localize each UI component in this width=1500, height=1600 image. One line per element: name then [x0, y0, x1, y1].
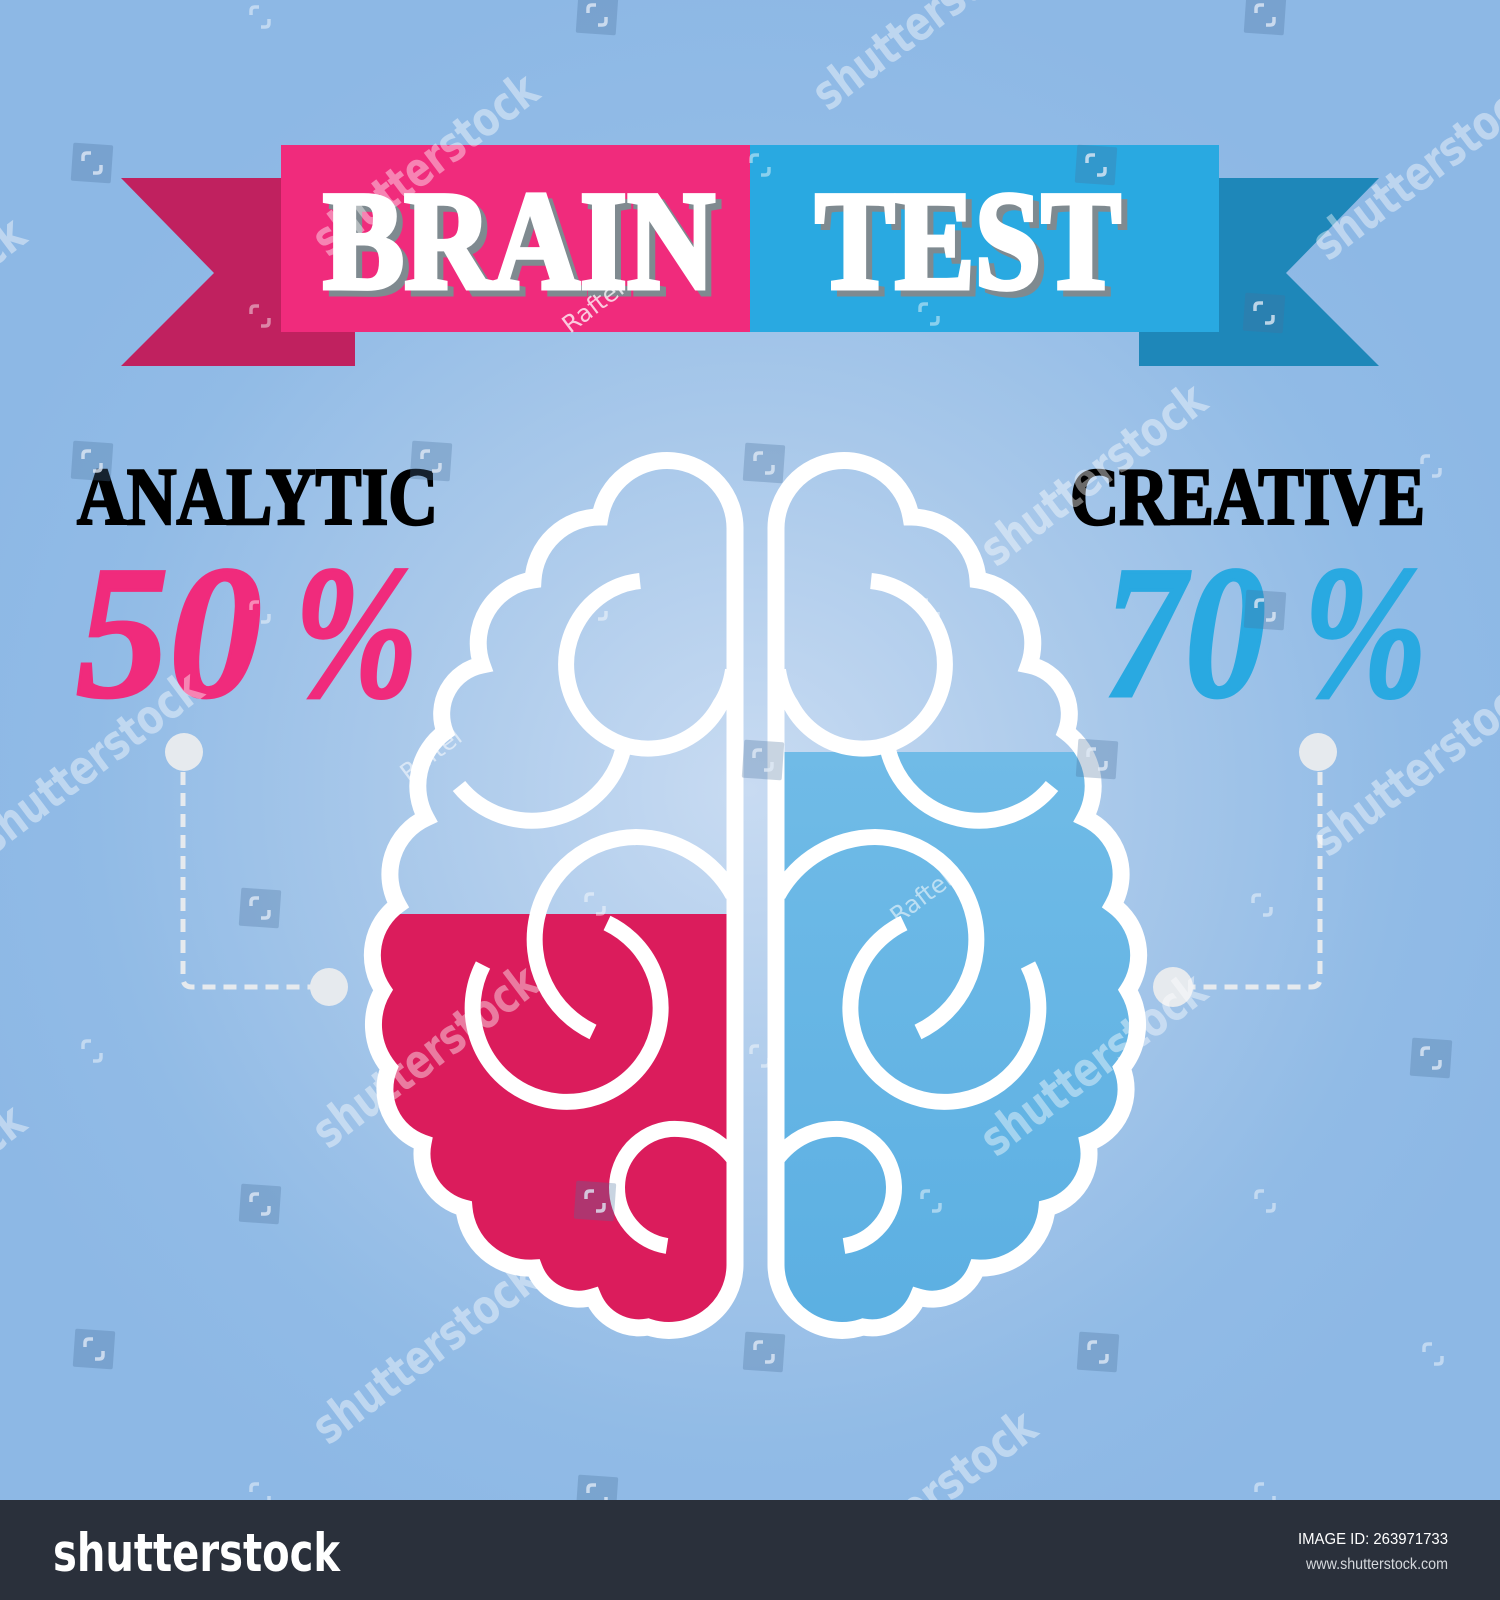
- footer logo: shutterstock: [53, 1523, 341, 1584]
- ribbon pink band: [281, 145, 750, 332]
- ribbon blue band: [750, 145, 1219, 332]
- heading: TEST: TEST: [821, 169, 1127, 325]
- connector: right: [1153, 733, 1337, 1007]
- footer image id: IMAGE ID: 263971733: [1298, 1531, 1448, 1548]
- value: 50 percent: 50: [76, 528, 262, 738]
- heading: BRAIN: BRAIN: [329, 169, 721, 325]
- footer url: www.shutterstock.com: [1305, 1556, 1448, 1573]
- ribbon left tail: [121, 178, 355, 366]
- watermark: shutterstock: [302, 61, 550, 268]
- title ribbon: [121, 145, 1379, 366]
- watermark: shutterstock: [302, 953, 550, 1160]
- footer bar: [0, 1500, 1500, 1600]
- connector: left: [165, 733, 348, 1006]
- value: 70 percent: 70: [1104, 528, 1266, 738]
- ribbon right tail: [1139, 178, 1379, 366]
- value: 50 percent: [76, 528, 418, 738]
- label: creative: CREATIVE: [1070, 451, 1425, 542]
- heading: BRAIN: BRAIN: [323, 163, 715, 319]
- value: 70 percent: %: [1303, 528, 1427, 738]
- watermark: shutterstock: [970, 371, 1218, 578]
- watermark: Raftel: [885, 865, 957, 930]
- watermark: shutterstock: [970, 961, 1218, 1168]
- brain: right hemisphere: [776, 461, 1139, 1330]
- watermark: shutterstock: [800, 1398, 1048, 1600]
- watermark: Raftel: [395, 722, 467, 787]
- heading: TEST: TEST: [815, 163, 1121, 319]
- label: analytic: ANALYTIC: [77, 451, 438, 542]
- value: 50 percent: %: [294, 528, 418, 738]
- value: 70 percent: [1104, 528, 1427, 738]
- watermark: Rafter: [557, 272, 632, 339]
- brain: left hemisphere: [372, 461, 735, 1330]
- watermark: shutterstock: [302, 1249, 550, 1456]
